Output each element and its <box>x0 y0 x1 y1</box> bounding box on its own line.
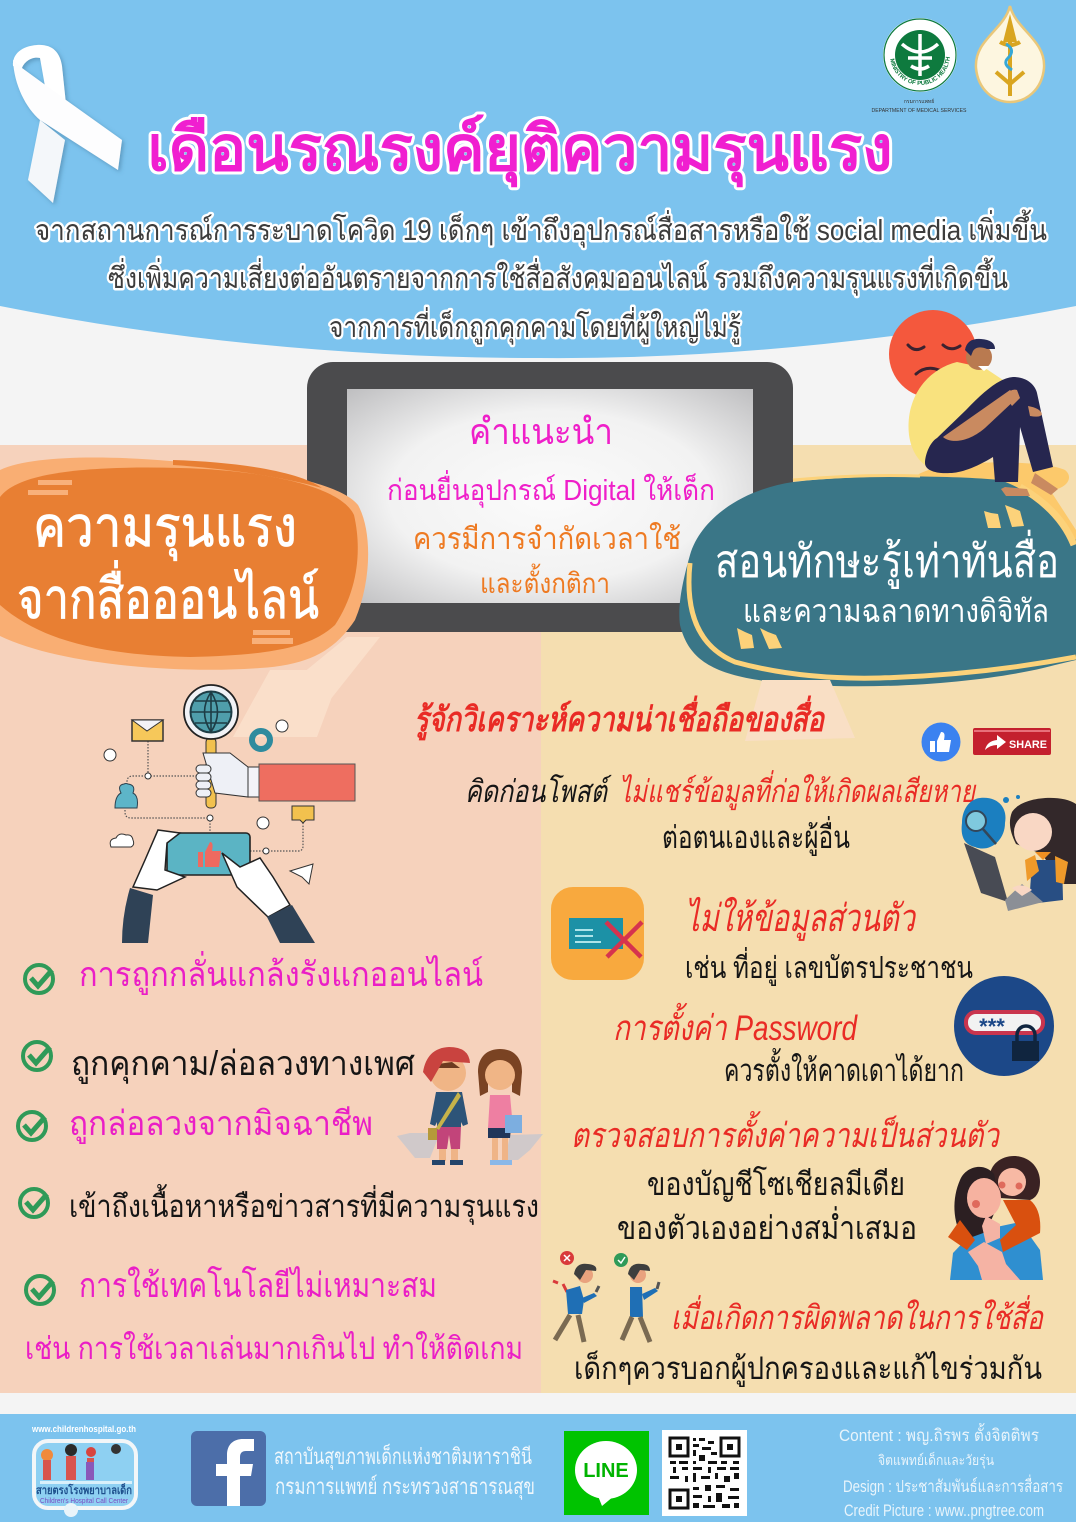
icon: share button: SHARE <box>1009 739 1047 751</box>
logo: department emblem <box>976 6 1044 102</box>
footer: hotline logo <box>31 1424 136 1517</box>
illustration: hugging family <box>948 1156 1043 1280</box>
logo: ministry of public health: กรมการแพทย์ <box>904 98 934 105</box>
footer: hotline logo: สายตรงโรงพยาบาลเด็ก <box>36 1483 132 1497</box>
footer: credits: จิตแพทย์เด็กและวัยรุ่น <box>878 1451 994 1469</box>
item: sexual harassment: ถูกคุกคาม/ล่อลวงทางเพศ <box>71 1045 415 1084</box>
intro text block <box>35 209 1047 345</box>
envelope <box>132 720 163 741</box>
icon: password lock <box>954 976 1054 1076</box>
item: cyberbullying: การถูกกลั่นแกล้งรังแกออนไลน์ <box>79 951 483 995</box>
illustration: two phone users <box>553 1251 659 1342</box>
illustration: girl with laptop <box>962 795 1076 911</box>
body: เช่น ที่อยู่ เลขบัตรประชาชน <box>685 947 973 986</box>
footer: hotline logo: www.childrenhospital.go.th <box>31 1424 136 1434</box>
icon: password lock: *** <box>979 1014 1005 1039</box>
icon: white ribbon <box>13 45 122 203</box>
item: violent content: เข้าถึงเนื้อหาหรือข่าวสารที่มีความรุนแรง <box>69 1184 539 1226</box>
body line one: คิดก่อนโพสต์ <box>465 774 612 809</box>
body line two: ของตัวเองอย่างสม่ำเสมอ <box>617 1206 917 1246</box>
panel: teal heading blob <box>679 476 1076 686</box>
panel: right background <box>541 445 1076 1393</box>
list: online violence items <box>18 951 539 1366</box>
logo: ministry of public health: MINISTRY OF PUBLIC HEALTH <box>890 56 950 85</box>
footer: hospital name: กรมการแพทย์ กระทรวงสาธารณสุข <box>275 1474 535 1500</box>
section: media literacy: ไม่แชร์ข้อมูลที่ก่อให้เกิดผลเสียหาย <box>619 770 976 811</box>
footer panel <box>0 1414 1076 1522</box>
section: privacy settings <box>571 1110 1001 1246</box>
paper plane <box>290 864 313 884</box>
icon: like <box>922 722 960 762</box>
panel: tablet advice <box>307 362 793 632</box>
body line two: ต่อตนเองและผู้อื่น <box>662 816 850 856</box>
left hand <box>133 830 185 890</box>
illustration: hand holding magnifier and phone <box>104 685 355 943</box>
intro text block: จากการที่เด็กถูกคุกคามโดยที่ผู้ใหญ่ไม่รู้ <box>329 307 741 345</box>
footer: credits: Content : พญ.ถิรพร ตั้งจิตติพร <box>839 1423 1039 1445</box>
panel: orange heading blob <box>0 458 368 670</box>
item: inappropriate technology use <box>25 1266 523 1366</box>
footer: hospital name <box>274 1442 535 1500</box>
phone <box>167 833 250 875</box>
item: inappropriate technology use: การใช้เทคโนโลยีไม่เหมาะสม <box>79 1266 437 1305</box>
footer: qr code <box>662 1430 747 1516</box>
decorative leaves <box>737 505 1024 649</box>
girl <box>478 1049 522 1096</box>
magnifier <box>206 738 216 808</box>
footer: hotline logo: Children's Hospital Call Center <box>40 1498 129 1505</box>
right hand <box>222 853 290 917</box>
title: เดือนรณรงค์ยุติความรุนแรง <box>148 114 892 187</box>
icon: share button <box>973 728 1051 755</box>
footer: line icon <box>564 1431 649 1515</box>
advice line three: และตั้งกติกา <box>480 563 610 599</box>
chat bubble <box>292 806 314 823</box>
footer: facebook icon <box>191 1431 266 1506</box>
icon: id card crossed <box>551 887 644 980</box>
faded accent <box>745 680 855 741</box>
section: media literacy <box>414 680 976 856</box>
header sky panel <box>0 0 1076 358</box>
item: inappropriate technology use: เช่น การใช้เวลาเล่นมากเกินไป ทำให้ติดเกม <box>25 1331 523 1366</box>
section: personal data <box>551 887 973 986</box>
item: scams: ถูกล่อลวงจากมิจฉาชีพ <box>69 1105 373 1144</box>
section: mistakes <box>553 1251 1044 1387</box>
footer: hospital name: สถาบันสุขภาพเด็กแห่งชาติมหาราชินี <box>274 1442 532 1470</box>
footer: credits <box>839 1423 1063 1520</box>
heading: การตั้งค่า Password <box>613 1002 858 1048</box>
section: password <box>613 976 1054 1088</box>
body: ควรตั้งให้คาดเดาได้ยาก <box>724 1048 964 1088</box>
heading: รู้จักวิเคราะห์ความน่าเชื่อถือของสื่อ <box>414 695 825 741</box>
advice heading: คำแนะนำ <box>469 411 613 452</box>
users <box>115 784 138 808</box>
footer: line icon: LINE <box>583 1460 629 1482</box>
faded light beams <box>233 637 380 737</box>
illustration: two children <box>397 1047 543 1165</box>
hand and sleeve <box>203 753 248 797</box>
item: violent content <box>20 1184 539 1226</box>
advice line two: ควรมีการจำกัดเวลาใช้ <box>413 522 681 556</box>
boy <box>439 1145 446 1161</box>
panel: left background <box>0 445 541 1393</box>
advice line one: ก่อนยื่นอุปกรณ์ Digital ให้เด็ก <box>387 470 715 508</box>
floor shape under person <box>915 462 1076 560</box>
heading text: ความรุนแรง <box>33 495 297 561</box>
gears <box>252 731 270 749</box>
heading: ไม่ให้ข้อมูลส่วนตัว <box>685 896 917 941</box>
panel: orange heading blob: จากสื่อออนไลน์ <box>17 560 319 630</box>
cloud <box>110 834 134 847</box>
body line one: ของบัญชีโซเชียลมีเดีย <box>647 1166 905 1202</box>
logo: ministry of public health: DEPARTMENT OF MEDICAL SERVICES <box>872 108 967 114</box>
illustration: sad person <box>908 339 1058 496</box>
logo: ministry of public health <box>872 18 967 114</box>
sad emoji <box>889 310 977 398</box>
